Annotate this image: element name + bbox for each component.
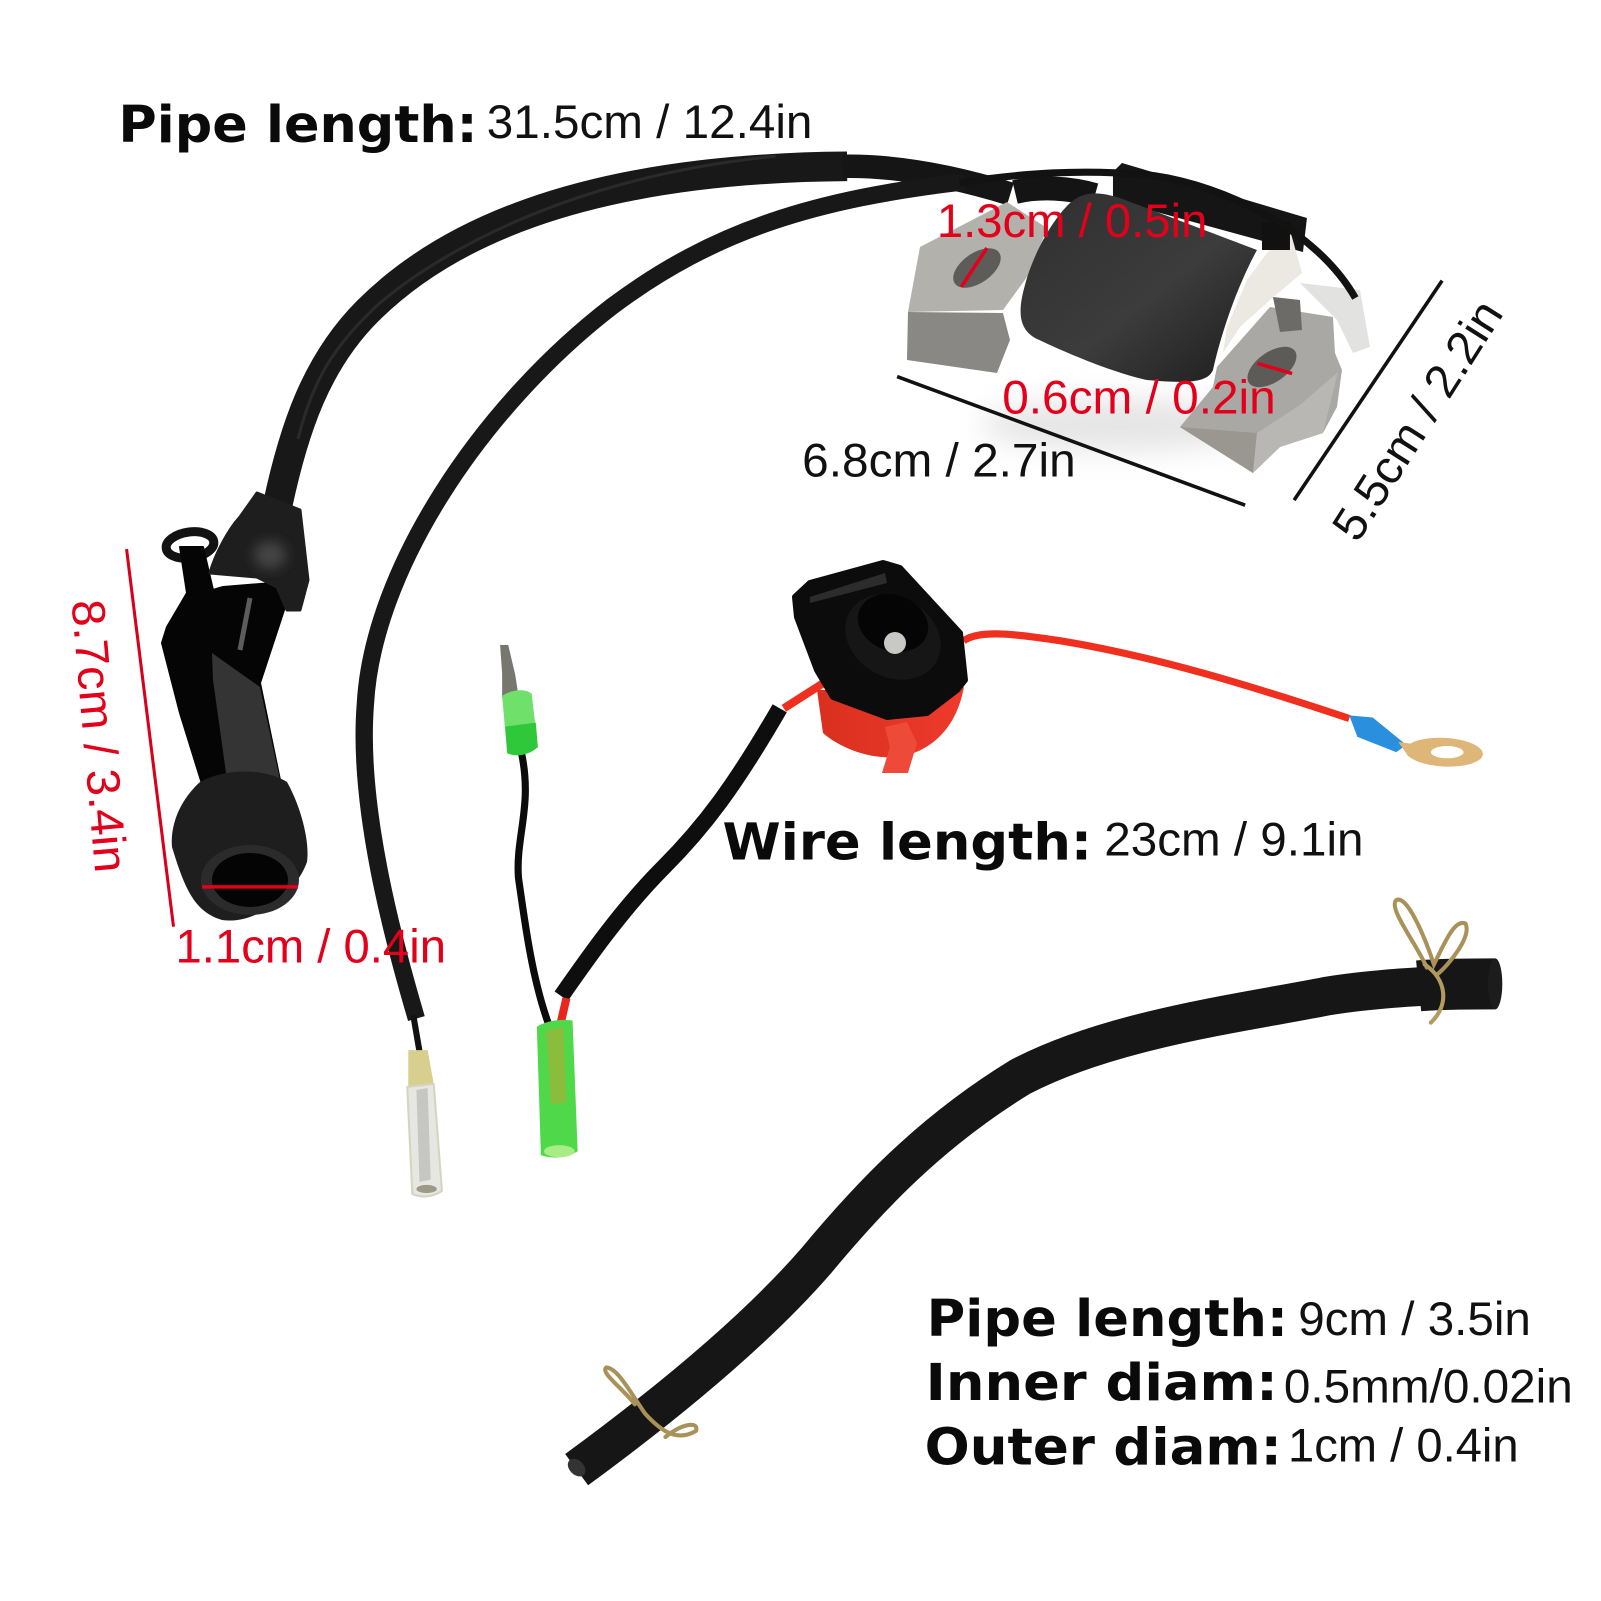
ignition coil — [907, 163, 1370, 473]
label: wire length — [723, 813, 1364, 872]
spark plug boot — [162, 493, 308, 921]
winding — [1021, 193, 1257, 382]
clear bullet connector — [407, 1050, 442, 1197]
label: main pipe length: Pipe length: — [118, 96, 478, 155]
label: coil hole large: 1.3cm / 0.5in — [937, 195, 1207, 247]
fuel pipe — [564, 958, 1502, 1480]
ring terminal — [1349, 715, 1484, 768]
right bracket — [1180, 307, 1342, 473]
label: fuel pipe specifications: 0.5mm/0.02in — [1284, 1360, 1573, 1412]
green connector bottom — [537, 1020, 578, 1158]
label: wire length: Wire length: — [723, 813, 1092, 872]
thick ignition cable — [278, 156, 1010, 505]
coil height line — [1294, 281, 1442, 500]
rubber collar — [210, 493, 308, 610]
green connector top — [500, 645, 538, 755]
label: fuel pipe specifications: 1cm / 0.4in — [1288, 1419, 1519, 1471]
label: fuel pipe specifications: Inner diam: — [926, 1354, 1278, 1413]
label: wire length: 23cm / 9.1in — [1104, 813, 1364, 865]
thin wire with clear bullet terminal — [364, 182, 964, 1051]
engine stop switch — [795, 563, 965, 773]
red measure marks on coil holes — [961, 248, 1292, 374]
hose clip left — [605, 1368, 696, 1437]
label: fuel pipe specifications — [925, 1290, 1573, 1478]
label: boot diameter: 1.1cm / 0.4in — [176, 920, 446, 972]
label: main pipe length: 31.5cm / 12.4in — [487, 96, 812, 148]
label: fuel pipe specifications: 9cm / 3.5in — [1298, 1293, 1531, 1345]
fine lead wire — [959, 172, 1355, 298]
label: coil width: 6.8cm / 2.7in — [802, 435, 1076, 487]
label: main pipe length — [118, 96, 812, 155]
label: fuel pipe specifications: Outer diam: — [925, 1419, 1282, 1478]
hose clip right — [1395, 900, 1467, 1023]
label: fuel pipe specifications: Pipe length: — [927, 1290, 1288, 1349]
white insulation — [1223, 230, 1302, 353]
boot diameter line — [202, 885, 298, 889]
coil width line — [897, 377, 1245, 505]
cable entry blocks — [1015, 188, 1095, 195]
label: coil hole small: 0.6cm / 0.2in — [1002, 371, 1276, 423]
label: coil height: 5.5cm / 2.2in — [1322, 291, 1513, 549]
boot length line — [127, 549, 174, 927]
label: boot length: 8.7cm / 3.4in — [61, 597, 137, 874]
engine switch wiring — [518, 634, 1349, 1025]
rubber end cap — [172, 771, 308, 921]
left bracket — [908, 202, 1047, 312]
